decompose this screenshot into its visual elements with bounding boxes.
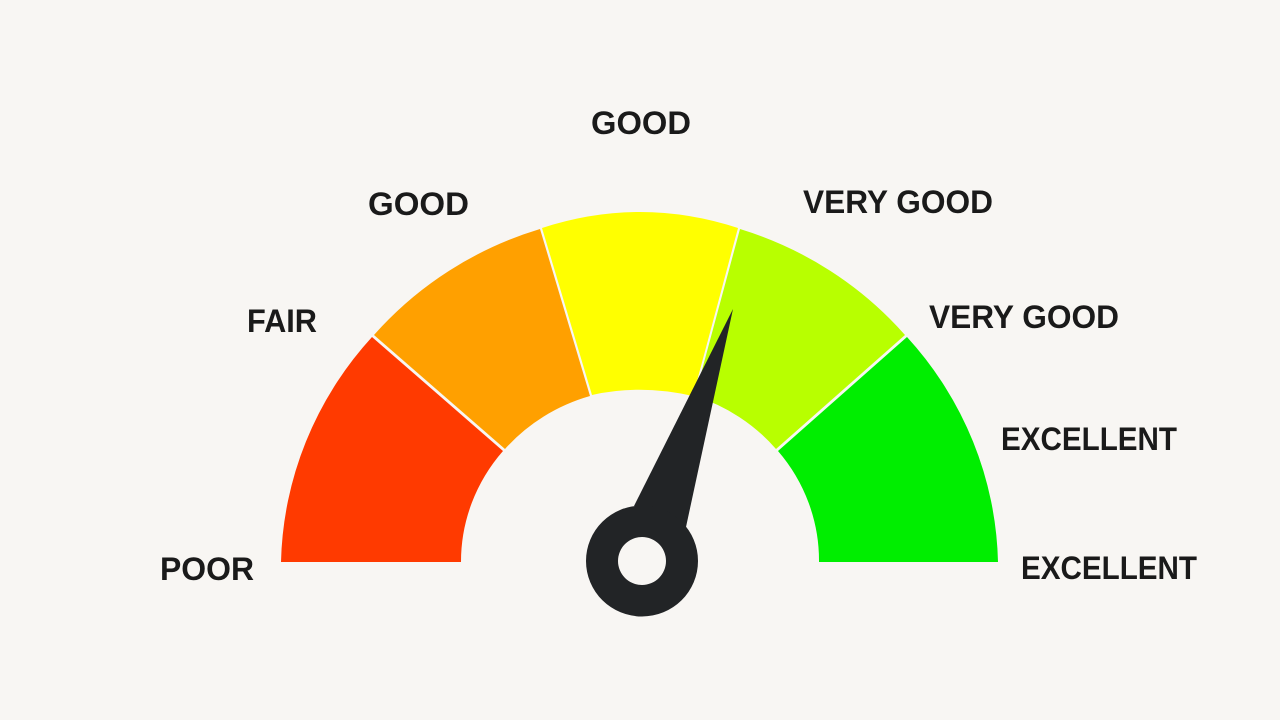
label: good left: GOOD [368,186,469,222]
segment: good yellow [542,212,738,396]
segment: poor red [281,337,503,562]
needle and hub [586,309,733,616]
segment: excellent green [778,337,998,562]
label: poor: POOR [160,551,254,587]
needle pointer [634,309,733,527]
hub ring [586,506,698,616]
label: excellent upper: EXCELLENT [1001,421,1177,457]
label: good top: GOOD [591,105,691,141]
segment: fair orange [374,229,590,449]
gauge arc [281,212,998,562]
label: excellent lower: EXCELLENT [1021,550,1197,586]
label: very good lower: VERY GOOD [929,299,1119,335]
segment: very good lime [695,229,905,449]
label: very good upper: VERY GOOD [803,184,993,220]
label: fair: FAIR [247,303,317,339]
